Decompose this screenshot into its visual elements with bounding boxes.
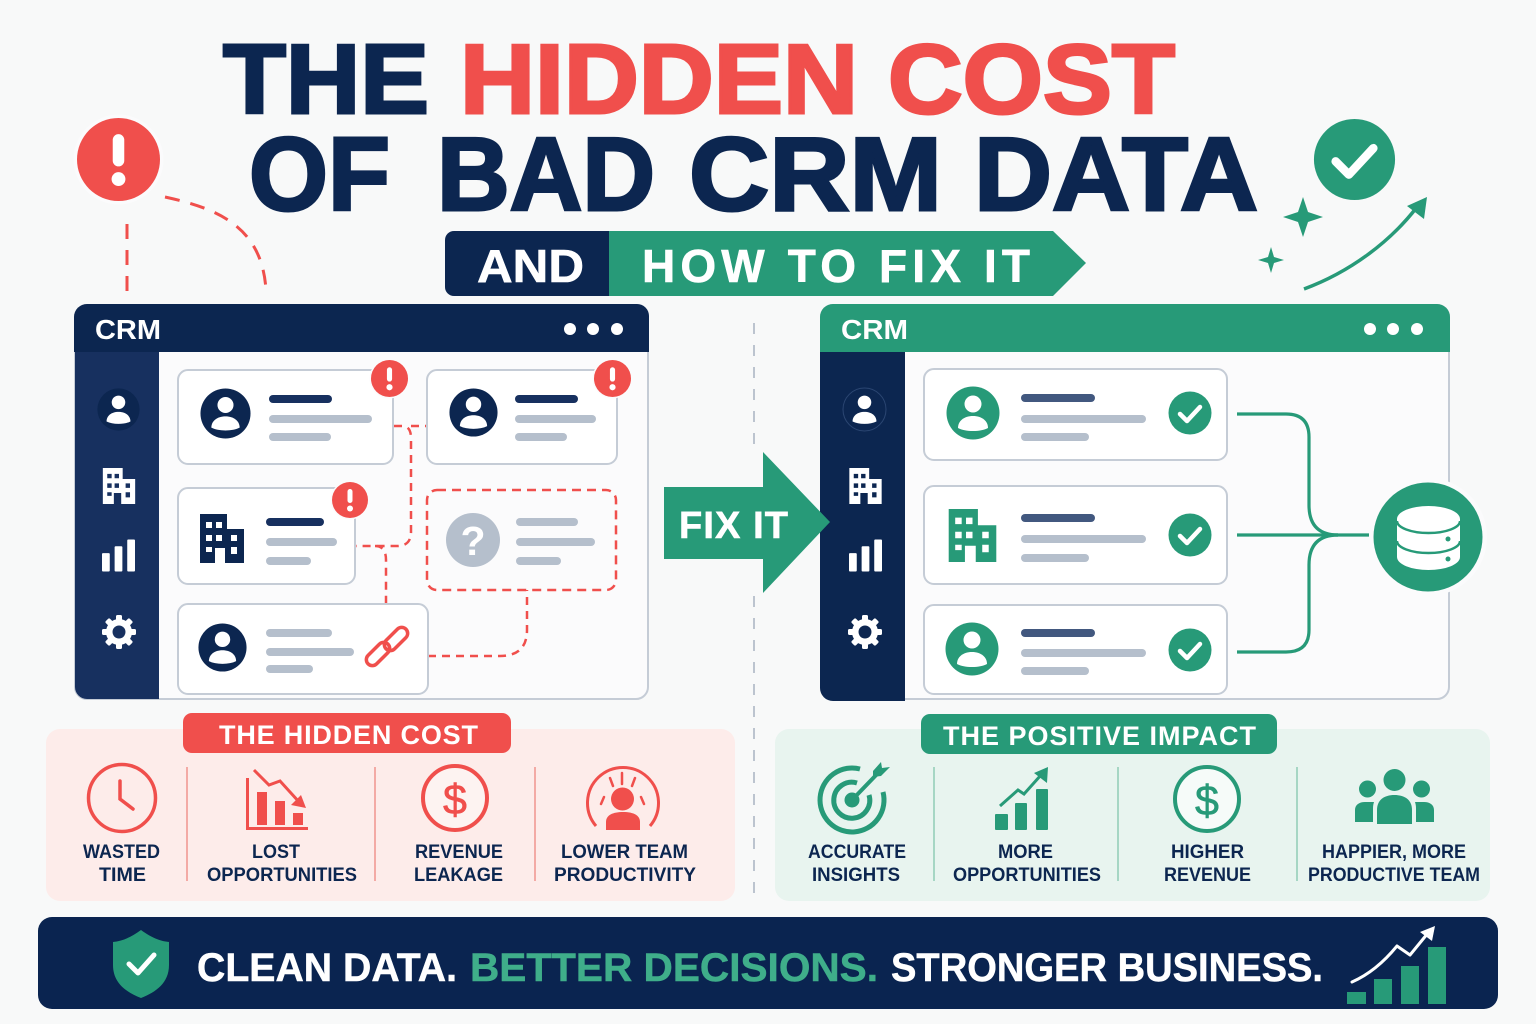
title: COST <box>888 24 1175 134</box>
icon: dollar coin: $ <box>1195 777 1219 825</box>
label: wasted time <box>83 841 160 886</box>
label: higher revenue <box>1164 841 1251 886</box>
icon: red alert <box>77 118 160 201</box>
label: lower team productivity <box>554 841 696 886</box>
label: accurate insights: INSIGHTS <box>812 864 900 886</box>
icon: declining chart <box>248 770 308 828</box>
label: wasted time: WASTED <box>83 841 160 863</box>
subtitle banner: HOW TO FIX IT <box>642 240 1030 292</box>
record card A <box>924 369 1227 460</box>
label: lost opportunities: LOST <box>252 841 300 863</box>
center dashed divider <box>753 323 755 900</box>
title: BAD <box>437 117 655 233</box>
tagline <box>197 946 1323 990</box>
label: happier team: HAPPIER, MORE <box>1322 841 1466 863</box>
dashed red warning lines <box>127 197 266 292</box>
label: accurate insights: ACCURATE <box>808 841 906 863</box>
column dividers <box>934 767 1297 881</box>
tagline: STRONGER BUSINESS. <box>891 946 1323 990</box>
subtitle banner: AND <box>477 240 584 292</box>
icon: team <box>1355 769 1434 824</box>
label: revenue leakage <box>414 841 503 886</box>
panel: the positive impact <box>775 714 1490 901</box>
record card C <box>924 605 1227 694</box>
icon: target <box>820 762 890 832</box>
record card 2 <box>427 360 631 464</box>
panel: clean CRM window <box>820 304 1487 701</box>
title: OF <box>249 117 390 233</box>
title: THE <box>223 24 429 134</box>
icon: broken link <box>364 625 410 668</box>
panel: bad CRM window <box>74 304 649 699</box>
tagline: BETTER DECISIONS. <box>470 946 878 990</box>
label: accurate insights <box>808 841 906 886</box>
label: lower team productivity: PRODUCTIVITY <box>554 864 696 886</box>
record card B <box>924 486 1227 584</box>
heading: THE HIDDEN COST <box>219 720 478 750</box>
label: lost opportunities <box>207 841 357 886</box>
label: revenue leakage: LEAKAGE <box>414 864 503 886</box>
heading <box>921 714 1277 754</box>
sparkles and rising arrow <box>1258 197 1427 289</box>
heading <box>183 713 511 753</box>
label: higher revenue: HIGHER <box>1171 841 1244 863</box>
icon: dollar coin: $ <box>443 776 467 824</box>
label: lower team productivity: LOWER TEAM <box>561 841 688 863</box>
icon: database <box>1369 478 1487 596</box>
window dots <box>564 323 623 335</box>
record card 1 <box>178 360 408 464</box>
window dots <box>1364 323 1423 335</box>
label: more opportunities <box>953 841 1101 886</box>
icon: dollar coin <box>423 766 487 830</box>
title <box>223 24 1258 233</box>
subtitle banner <box>445 231 1086 296</box>
CRM label: CRM <box>841 314 908 345</box>
label: lost opportunities: OPPORTUNITIES <box>207 864 357 886</box>
connectors to database <box>1237 414 1369 652</box>
footer banner <box>38 917 1498 1009</box>
label: more opportunities: OPPORTUNITIES <box>953 864 1101 886</box>
icon: stressed worker <box>588 767 658 830</box>
record card 4: missing data: ? <box>460 518 486 564</box>
column dividers <box>187 767 535 881</box>
label: higher revenue: REVENUE <box>1164 864 1251 886</box>
label: happier team: PRODUCTIVE TEAM <box>1308 864 1480 886</box>
label: revenue leakage: REVENUE <box>415 841 503 863</box>
panel: the hidden cost <box>46 713 735 901</box>
arrow: fix it: FIX IT <box>679 505 788 547</box>
heading: THE POSITIVE IMPACT <box>943 721 1256 751</box>
label: more opportunities: MORE <box>998 841 1053 863</box>
title: HIDDEN <box>460 24 858 134</box>
tagline: CLEAN DATA. <box>197 946 457 990</box>
icon: shield check <box>113 930 169 998</box>
sidebar icons <box>97 388 140 649</box>
title: DATA <box>974 117 1258 233</box>
icon: growth chart <box>1347 926 1446 1004</box>
icon: clock <box>88 764 156 832</box>
label: wasted time: TIME <box>99 864 146 886</box>
sidebar icons <box>843 388 886 649</box>
icon: dollar coin <box>1175 767 1239 831</box>
arrow: fix it <box>664 452 830 593</box>
label: happier team <box>1308 841 1480 886</box>
record card 3 <box>178 482 368 584</box>
record card 4: missing data <box>427 490 616 590</box>
CRM label: CRM <box>95 314 161 345</box>
record card 5: broken link <box>178 604 428 694</box>
icon: green check <box>1314 119 1395 200</box>
dashed connectors <box>356 426 527 656</box>
icon: growth chart <box>995 767 1048 830</box>
title: CRM <box>689 117 942 233</box>
